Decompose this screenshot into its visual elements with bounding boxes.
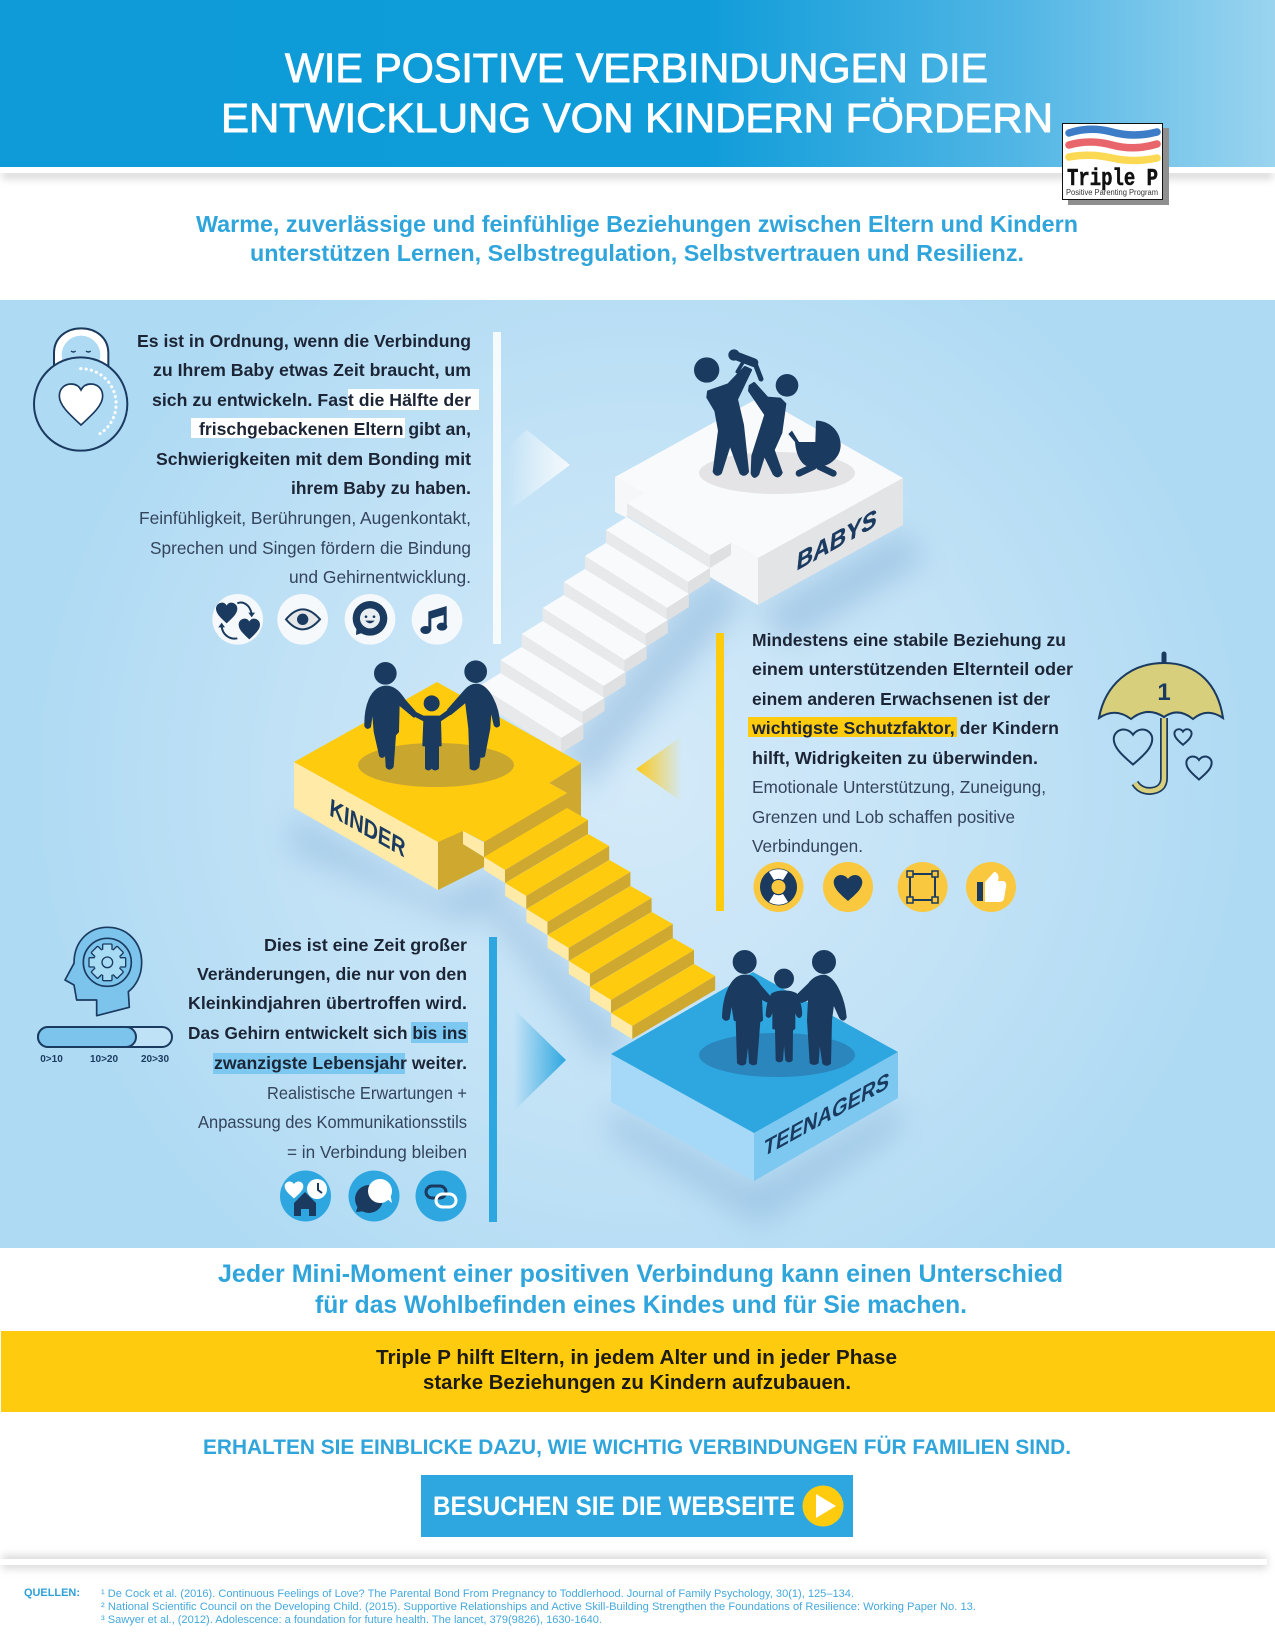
- text block: teenagers: Anpassung des Kommunikationsstils: [198, 1112, 467, 1132]
- arrow: blue triangle: [500, 1000, 566, 1125]
- text block: babies: Schwierigkeiten mit dem Bonding mit: [156, 449, 471, 469]
- text block: babies: sich zu entwickeln. Fast die Hälfte der: [152, 390, 471, 410]
- footer divider: [0, 1555, 1267, 1569]
- figures: parents with teenager: [723, 951, 846, 1065]
- icon: padlock with baby face and heart: [34, 328, 127, 451]
- title: ENTWICKLUNG VON KINDERN FÖRDERN: [221, 95, 1053, 141]
- text block: teenagers: Dies ist eine Zeit großer: [264, 935, 467, 955]
- blue vertical bar: [489, 937, 497, 1222]
- icon: boundary square: [898, 862, 948, 912]
- text block: teenagers: zwanzigste Lebensjahr weiter.: [214, 1053, 467, 1073]
- text block: teenagers: Veränderungen, die nur von den: [197, 964, 467, 984]
- icon: speech bubbles: [348, 1170, 400, 1222]
- icon: umbrella with hearts: 1: [1157, 679, 1171, 706]
- blue highlights: [213, 1022, 468, 1074]
- text block: children: wichtigste Schutzfaktor, der Kindern: [751, 718, 1059, 738]
- platform: babies: [615, 397, 903, 605]
- white highlights: [191, 389, 479, 438]
- text block: babies: Sprechen und Singen fördern die Bindung: [150, 538, 471, 558]
- sources: ¹ De Cock et al. (2016). Continuous Feelings of Love? The Parental Bond From Pregnancy to Toddlerhood. Journal of Family Psychology, 30(1), 125–134.: [101, 1588, 854, 1600]
- figures: parents lifting baby with pram: [694, 349, 841, 477]
- text block: teenagers: Kleinkindjahren übertroffen wird.: [188, 993, 467, 1013]
- text block: teenagers: = in Verbindung bleiben: [287, 1142, 467, 1162]
- white vertical bar: [493, 332, 501, 644]
- text block: teenagers: [188, 935, 468, 1162]
- text block: babies: und Gehirnentwicklung.: [289, 567, 471, 587]
- sources: [24, 1587, 976, 1626]
- platform: children: [294, 682, 581, 890]
- arrow: white triangle: [503, 430, 570, 515]
- title: WIE POSITIVE VERBINDUNGEN DIE: [285, 45, 988, 91]
- icon: linked rings: [416, 1170, 466, 1222]
- label: KINDER: KINDER: [329, 793, 406, 864]
- sources: QUELLEN:: [24, 1587, 80, 1599]
- progress bar with age labels: [38, 1027, 172, 1065]
- yellow band: Triple P hilft Eltern, in jedem Alter und in jeder Phase: [376, 1347, 897, 1369]
- shadow ellipse: [699, 452, 855, 494]
- text block: children: Grenzen und Lob schaffen positive: [752, 807, 1015, 827]
- text block: children: Verbindungen.: [752, 836, 863, 856]
- closing statement: für das Wohlbefinden eines Kindes und für Sie machen.: [315, 1291, 967, 1319]
- soft shadows under the platforms and stairs: [290, 530, 925, 1225]
- panel: staircase background: [0, 300, 1275, 1248]
- text block: teenagers: Das Gehirn entwickelt sich bis ins: [188, 1023, 467, 1043]
- icon: heart: [823, 862, 873, 912]
- text block: teenagers: Realistische Erwartungen +: [267, 1083, 467, 1103]
- white stairs: [479, 493, 731, 753]
- closing statement: [218, 1260, 1063, 1319]
- icon: life ring: [754, 862, 804, 912]
- button: BESUCHEN SIE DIE WEBSEITE: [433, 1491, 795, 1521]
- shadow ellipse: [699, 1033, 855, 1077]
- label: TEENAGERS: TEENAGERS: [762, 1067, 891, 1163]
- call to action heading: ERHALTEN SIE EINBLICKE DAZU, WIE WICHTIG VERBINDUNGEN FÜR FAMILIEN SIND.: [203, 1436, 1071, 1459]
- icon: music note: [412, 594, 462, 645]
- title: [221, 45, 1053, 141]
- yellow vertical bar: [716, 633, 724, 911]
- icons: support row: [754, 862, 1016, 912]
- label: BABYS: BABYS: [795, 504, 878, 577]
- icon: hearts exchange: [212, 594, 263, 645]
- text block: babies: [137, 331, 479, 587]
- icon: eye: [277, 594, 328, 645]
- text block: babies: frischgebackenen Eltern gibt an,: [199, 419, 471, 439]
- text block: babies: zu Ihrem Baby etwas Zeit braucht, um: [153, 360, 471, 380]
- progress bar with age labels: 10>20: [90, 1054, 118, 1065]
- sources: ² National Scientific Council on the Developing Child. (2015). Supportive Relationships and Active Skill-Building Strengthen the Foundations of Resilience: Working Paper No. 13.: [101, 1601, 976, 1613]
- subtitle: Warme, zuverlässige und feinfühlige Beziehungen zwischen Eltern und Kindern: [196, 211, 1078, 237]
- text block: children: Mindestens eine stabile Beziehung zu: [752, 630, 1066, 650]
- button: [421, 1475, 853, 1537]
- header band: [0, 0, 1275, 179]
- icon: umbrella with hearts: [1099, 654, 1223, 791]
- logo: Triple P: [1062, 124, 1169, 205]
- subtitle: [196, 211, 1078, 266]
- closing statement: Jeder Mini-Moment einer positiven Verbindung kann einen Unterschied: [218, 1260, 1063, 1288]
- yellow band: starke Beziehungen zu Kindern aufzubauen.: [423, 1372, 851, 1394]
- text block: children: [748, 630, 1073, 856]
- text block: babies: Feinfühligkeit, Berührungen, Augenkontakt,: [139, 508, 471, 528]
- text block: babies: Es ist in Ordnung, wenn die Verbindung: [137, 331, 471, 351]
- sources: ³ Sawyer et al., (2012). Adolescence: a foundation for future health. The lancet, 379(9826), 1630-1640.: [101, 1614, 602, 1626]
- text block: children: einem anderen Erwachsenen ist der: [752, 689, 1050, 709]
- text block: children: Emotionale Unterstützung, Zuneigung,: [752, 777, 1046, 797]
- text block: children: einem unterstützenden Elternteil oder: [752, 659, 1073, 679]
- icon: thumbs up: [966, 862, 1016, 912]
- icon: head with gear: [65, 927, 142, 1016]
- yellow stairs: [484, 808, 715, 1039]
- icons: bonding row: [212, 594, 462, 645]
- yellow highlight: [748, 717, 957, 737]
- shadow ellipse: [358, 743, 514, 787]
- icon: baby speech bubble: [345, 594, 395, 645]
- icon: play circle: [802, 1486, 844, 1526]
- arrow: yellow triangle: [636, 736, 682, 802]
- text block: children: hilft, Widrigkeiten zu überwinden.: [752, 748, 1038, 768]
- icons: communication row: [280, 1170, 466, 1222]
- platform: teenagers: [611, 972, 898, 1181]
- text block: babies: ihrem Baby zu haben.: [291, 478, 471, 498]
- progress bar with age labels: 0>10: [40, 1054, 63, 1065]
- yellow band: [1, 1331, 1275, 1412]
- subtitle: unterstützen Lernen, Selbstregulation, Selbstvertrauen und Resilienz.: [250, 240, 1024, 266]
- logo: Triple P: Triple P: [1067, 166, 1158, 193]
- icon: home, heart and clock: [280, 1170, 331, 1222]
- progress bar with age labels: 20>30: [141, 1054, 169, 1065]
- logo: Triple P: Positive Parenting Program: [1066, 188, 1158, 197]
- figures: parents holding child's hands: [365, 661, 499, 770]
